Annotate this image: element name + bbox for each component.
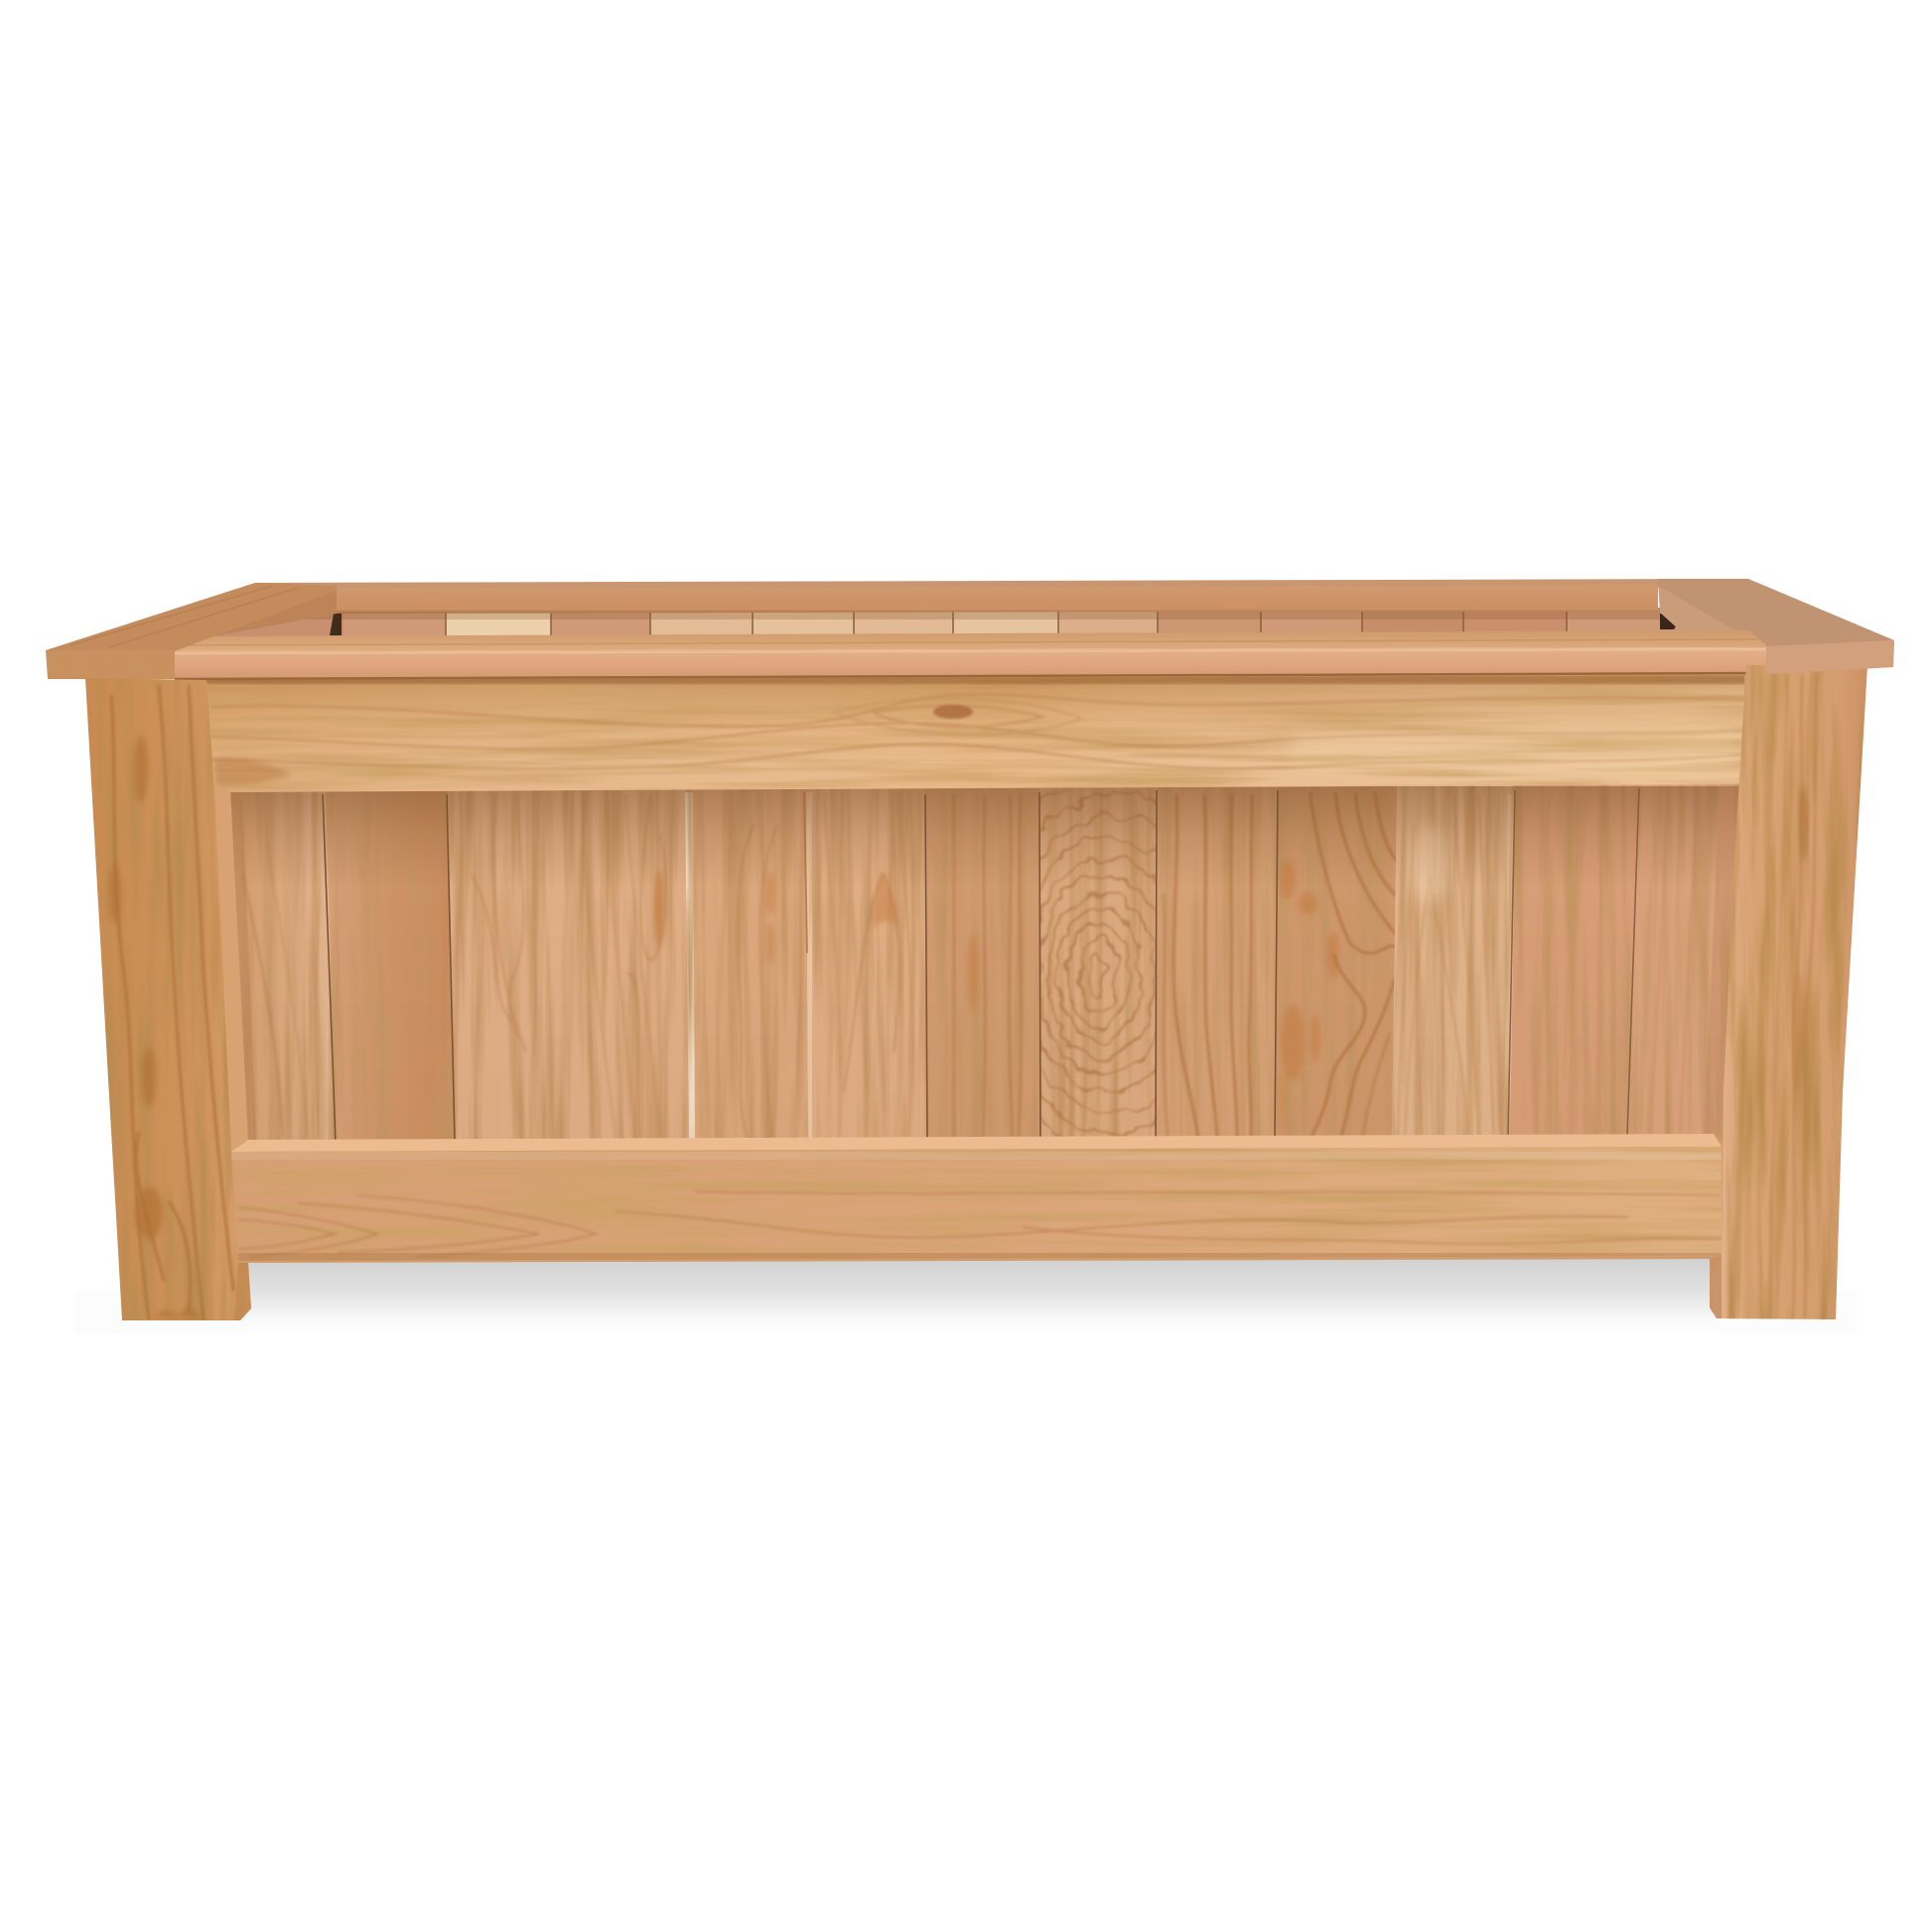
ring grain: centre board [1040, 788, 1157, 1136]
pale bands [1293, 732, 1735, 767]
board seams [323, 788, 1639, 1142]
front rim [175, 630, 1768, 679]
fine grain: light board [1398, 794, 1698, 1138]
right cap board [1658, 579, 1894, 674]
lower rail [228, 1134, 1727, 1266]
panel side shading [226, 790, 256, 1142]
vertical wood grain [218, 779, 1747, 1152]
back rail [255, 579, 1748, 614]
ground haze [74, 1291, 1857, 1334]
corner gaps [330, 614, 1678, 635]
right post grain [1706, 663, 1872, 1325]
left post grain [100, 679, 248, 1320]
straight grain: board beside rings [1164, 794, 1252, 1138]
left post [79, 675, 258, 1325]
right post [1706, 663, 1872, 1325]
right cap front overlay [1766, 640, 1894, 674]
panel top shadow [223, 786, 1742, 1142]
inner panel boards [230, 784, 1739, 1150]
knots and blotches [654, 861, 1339, 1132]
lower rail grain [228, 1142, 1727, 1266]
interior back boards [214, 608, 1748, 639]
top rail [204, 673, 1748, 794]
illustration: cedar planter box [46, 579, 1894, 1320]
left cap board [46, 583, 337, 679]
planter box [46, 579, 1894, 1325]
dark blotch: left end [213, 758, 293, 785]
floor shadow [243, 1257, 1718, 1334]
top rail grain [204, 673, 1748, 794]
knot [933, 705, 973, 719]
pale glow: light board top [1410, 824, 1449, 903]
cathedral grain: knot board [1311, 792, 1400, 1140]
front backing [207, 670, 1747, 1263]
post blotches [109, 736, 204, 1318]
board grain figures [243, 794, 1021, 1138]
